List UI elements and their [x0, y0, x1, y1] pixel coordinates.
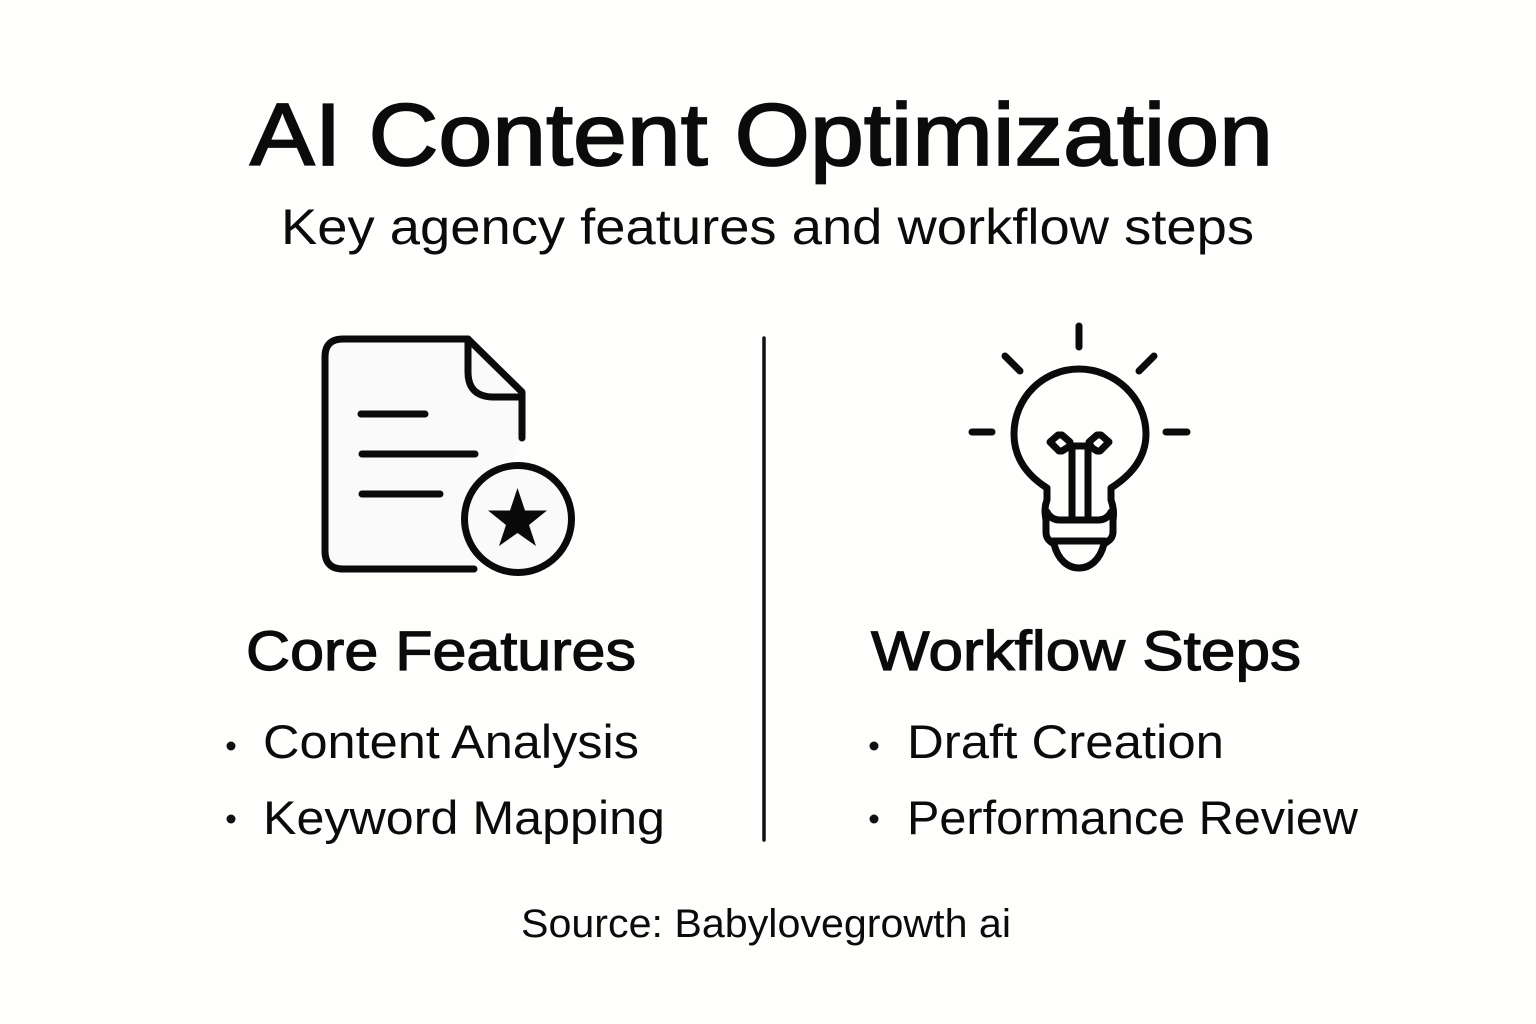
title: AI Content Optimization: [250, 85, 1273, 184]
subtitle: Key agency features and workflow steps: [281, 199, 1254, 255]
source note: Source: Babylovegrowth ai: [521, 902, 1011, 946]
heading: Core Features: Core Features: [246, 619, 636, 682]
list: core features: [226, 715, 665, 844]
list: workflow steps: Draft Creation: [907, 715, 1224, 768]
list: workflow steps: [870, 715, 1359, 844]
vertical divider: [762, 338, 766, 840]
icon: light bulb: [972, 326, 1187, 568]
list: core features: Content Analysis: [263, 715, 639, 768]
icon: document with star badge: [325, 339, 572, 572]
heading: Workflow Steps: Workflow Steps: [871, 619, 1301, 682]
list: core features: Keyword Mapping: [263, 791, 665, 844]
list: workflow steps: Performance Review: [907, 791, 1359, 844]
